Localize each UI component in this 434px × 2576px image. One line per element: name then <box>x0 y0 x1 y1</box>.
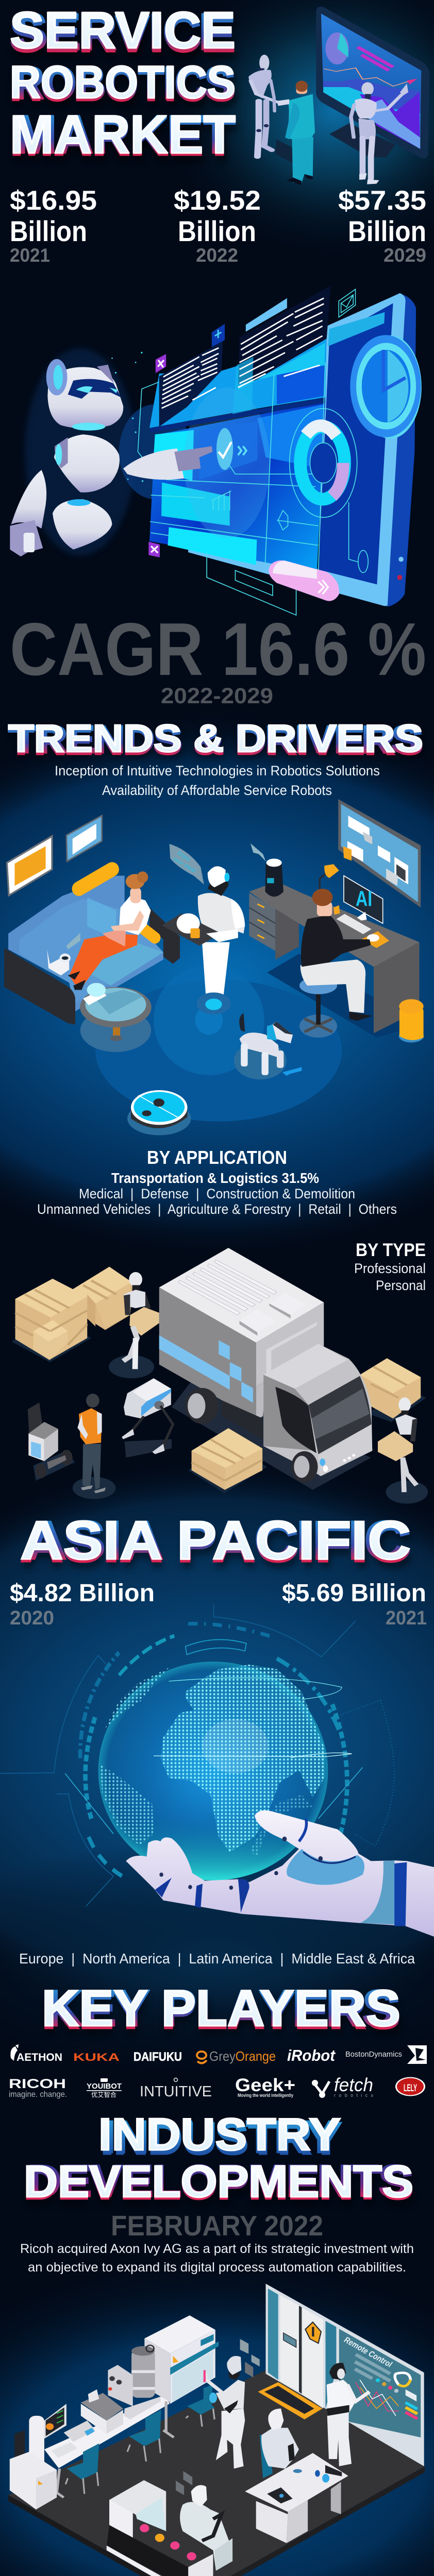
value 2021: 2021 <box>10 245 50 266</box>
illustration: robots and businessman at monitor <box>248 7 429 185</box>
market values <box>10 185 426 266</box>
heading: Industry Developments <box>24 2109 415 2215</box>
title: Service Robotics Market: SERVICE <box>10 5 236 63</box>
logo: Aethon: AETHON <box>16 2052 62 2063</box>
woman with hologram <box>68 871 151 990</box>
robot at screen <box>327 2363 370 2466</box>
glow behind hologram <box>119 404 191 499</box>
logo: GreyOrange: GreyOrange <box>209 2048 276 2064</box>
floor <box>8 2370 425 2576</box>
industry line: INDUSTRY <box>103 2111 337 2162</box>
flask cabinet with robot <box>107 2480 232 2576</box>
heading: Trends and Drivers: TRENDS & DRIVERS <box>8 719 423 762</box>
box front <box>188 1428 267 1493</box>
segment: by type: BY TYPE <box>356 1240 426 1260</box>
title: Service Robotics Market <box>10 2 238 174</box>
heading: Asia Pacific: ASIA PACIFIC <box>20 1510 411 1571</box>
yellow bin <box>399 999 424 1042</box>
trends text: Availability of Affordable Service Robots <box>102 783 332 798</box>
title: Service Robotics Market: SERVICE <box>10 2 236 59</box>
logo: Boston Dynamics <box>345 2045 427 2064</box>
long lab bench <box>44 2394 174 2498</box>
title: Service Robotics Market: SERVICE <box>14 3 232 61</box>
regional values: 2021 <box>386 1607 427 1629</box>
developments line: DEVELOPMENTS <box>24 2157 413 2207</box>
logo: Ricoh: imagine. change. <box>9 2090 67 2099</box>
logo: Daifuku: DAIFUKU <box>133 2050 182 2064</box>
floating icons <box>176 2339 260 2495</box>
logo: Fetch Robotics <box>312 2074 373 2098</box>
smart speaker <box>251 843 283 896</box>
globe <box>98 1662 352 1880</box>
regions list: Europe | North America | Latin America | Middle East & Africa <box>19 1951 415 1967</box>
desk <box>249 882 420 1033</box>
hologram panel <box>149 338 327 572</box>
waiter robot <box>162 844 245 1014</box>
robot assistant <box>10 359 212 556</box>
person in vest <box>73 1394 115 1499</box>
robot at hood <box>204 2356 245 2469</box>
heading: Asia Pacific: ASIA PACIFIC <box>22 1518 413 1579</box>
regional values: $4.82 Billion <box>10 1580 155 1607</box>
development date: FEBRUARY 2022 <box>111 2210 323 2242</box>
logo: Youibot: 优艾智合 <box>91 2091 116 2098</box>
logo: Fetch Robotics: robotics <box>334 2093 373 2098</box>
regional values <box>10 1580 427 1629</box>
tank machine <box>108 2345 160 2419</box>
developments line: DEVELOPMENTS <box>28 2156 409 2206</box>
segment: by application: Medical | Defense | Construction & Demolition <box>79 1186 355 1201</box>
monitor stand <box>329 123 395 158</box>
illustration: globe held by robot hand <box>0 1605 434 1937</box>
tablet buttons <box>397 557 404 580</box>
illustration: robot touching holographic tablet <box>10 285 422 615</box>
back wall with door and remote control screen <box>266 2284 424 2466</box>
heading: Key Players: KEY PLAYERS <box>46 1979 396 2037</box>
segment: by type: Personal <box>376 1278 426 1293</box>
robot cat with speech bubble <box>47 933 80 975</box>
heading: Trends and Drivers: TRENDS & DRIVERS <box>8 717 423 760</box>
value 2022 <box>174 185 261 266</box>
value 2021: Billion <box>10 215 87 247</box>
industry line: INDUSTRY <box>98 2109 341 2160</box>
segment: by type <box>354 1240 426 1293</box>
logo: Ricoh: RICOH <box>9 2077 66 2091</box>
robot dog <box>234 1013 302 1079</box>
hologram widgets <box>138 289 368 615</box>
title: Service Robotics Market: MARKET <box>11 113 238 174</box>
clock <box>350 335 422 438</box>
development description: Ricoh acquired Axon Ivy AG as a part of its strategic investment with <box>20 2242 414 2256</box>
lamp <box>320 864 339 889</box>
heading: Key Players: KEY PLAYERS <box>42 1979 400 2037</box>
illustration: robotics laboratory <box>8 2284 425 2576</box>
logo: KUKA: KUKA <box>73 2052 120 2063</box>
logo: Geek+: Geek+ <box>235 2075 295 2095</box>
heading: Key Players: KEY PLAYERS <box>42 1982 400 2039</box>
heading: Key Players: KEY PLAYERS <box>43 1988 403 2045</box>
sink unit <box>81 2389 123 2434</box>
fume hood <box>144 2315 219 2404</box>
CAGR figure: 2022-2029 <box>161 684 273 708</box>
logo: Lely <box>395 2077 425 2096</box>
title: Service Robotics Market: MARKET <box>10 105 236 165</box>
value 2021: $16.95 <box>10 185 97 216</box>
trends text: Inception of Intuitive Technologies in Robotics Solutions <box>55 763 380 778</box>
quadruped robot <box>122 1378 173 1458</box>
computer monitor with AI <box>336 876 389 948</box>
truck cab <box>263 1344 372 1482</box>
wall board <box>338 799 421 907</box>
hud rings <box>0 1605 394 1906</box>
title: Service Robotics Market: SERVICE <box>11 11 238 69</box>
illustration: smart home with service robots <box>4 799 424 1136</box>
developments line: DEVELOPMENTS <box>25 2165 415 2215</box>
robot vacuum <box>127 1090 191 1136</box>
regional values: $5.69 Billion <box>282 1580 426 1607</box>
segment: by application: Unmanned Vehicles | Agriculture & Forestry | Retail | Others <box>37 1201 397 1217</box>
monitor <box>316 7 429 159</box>
man at desk <box>299 889 372 1038</box>
title: Service Robotics Market: ROBOTICS <box>11 64 238 116</box>
back wall with door and remote control screen: Remote Control <box>342 2335 394 2369</box>
value 2029 <box>338 185 426 266</box>
title: Service Robotics Market: MARKET <box>10 107 236 167</box>
segment: by application <box>37 1147 397 1217</box>
developments line: DEVELOPMENTS <box>24 2159 413 2209</box>
development description <box>20 2242 414 2275</box>
development description: an objective to expand its digital process automation capabilities. <box>28 2260 406 2275</box>
chairs <box>65 2384 214 2494</box>
hologram document panels <box>159 285 331 427</box>
logo: Intuitive: INTUITIVE <box>140 2083 212 2100</box>
robot hand <box>126 1810 434 1937</box>
donut gauge <box>290 409 357 517</box>
waiter robot: your meal <box>172 856 196 874</box>
segment: by type: Professional <box>354 1261 426 1276</box>
title: Service Robotics Market: ROBOTICS <box>10 56 236 108</box>
segment: by application: BY APPLICATION <box>147 1147 287 1168</box>
robot carrying box <box>109 1272 159 1378</box>
desk with microscope stage <box>245 2453 348 2543</box>
regional values: 2020 <box>10 1607 54 1629</box>
value 2021 <box>10 185 97 266</box>
robot with box right <box>378 1397 428 1504</box>
value 2029: 2029 <box>383 245 426 266</box>
logo: Ricoh <box>9 2077 67 2099</box>
truck <box>159 1248 324 1439</box>
robot left <box>248 55 285 157</box>
title: Service Robotics Market: ROBOTICS <box>14 57 232 109</box>
value 2022: $19.52 <box>174 185 261 216</box>
robot at microscope <box>260 2409 299 2478</box>
businessman with briefcase <box>275 80 315 185</box>
box stacks left <box>12 1267 133 1362</box>
segment: by application: Transportation & Logistics 31.5% <box>111 1170 319 1186</box>
value 2022: 2022 <box>196 245 238 266</box>
heading: Trends and Drivers: TRENDS & DRIVERS <box>9 722 424 766</box>
sparkle particles <box>111 352 143 482</box>
logo: Aethon <box>10 2044 62 2063</box>
sofa <box>4 869 180 1025</box>
logo: Boston Dynamics: BostonDynamics <box>345 2050 402 2059</box>
logo: iRobot: iRobot <box>287 2046 336 2064</box>
floor circles <box>95 954 421 1122</box>
pink pill button <box>269 561 339 601</box>
coffee table <box>80 983 152 1052</box>
logo: Youibot <box>87 2078 122 2098</box>
heading: Asia Pacific: ASIA PACIFIC <box>25 1510 406 1571</box>
robot glow <box>25 348 136 555</box>
title: Service Robotics Market: MARKET <box>14 105 232 165</box>
wall pictures <box>7 816 102 895</box>
title: Service Robotics Market: ROBOTICS <box>10 59 236 110</box>
value 2029: Billion <box>348 215 426 247</box>
wheeled kiosk robot <box>28 1402 75 1481</box>
value 2022: Billion <box>178 215 256 247</box>
tablet <box>188 293 416 607</box>
heading: Asia Pacific: ASIA PACIFIC <box>20 1513 411 1573</box>
trends text <box>55 763 380 798</box>
microscope and workstation <box>10 2404 95 2510</box>
industry line: INDUSTRY <box>101 2113 342 2164</box>
logo: Youibot: YOUIBOT <box>87 2082 122 2091</box>
logo: Geek+: Moving the world intelligently <box>238 2093 294 2098</box>
heading: Trends and Drivers: TRENDS & DRIVERS <box>12 718 419 761</box>
company logos <box>9 2044 427 2100</box>
value 2029: $57.35 <box>338 185 426 216</box>
logo: Fetch Robotics: fetch <box>334 2074 373 2095</box>
illustration: logistics truck with robots <box>12 1248 428 1504</box>
robot right <box>351 82 408 184</box>
logo: Lely: LELY <box>404 2083 417 2094</box>
computer monitor with AI: AI <box>356 887 372 911</box>
truck shadow <box>172 1382 371 1490</box>
door mat <box>258 2382 323 2419</box>
box stack right <box>360 1358 426 1422</box>
waiter robot: Enjoy <box>176 850 192 863</box>
